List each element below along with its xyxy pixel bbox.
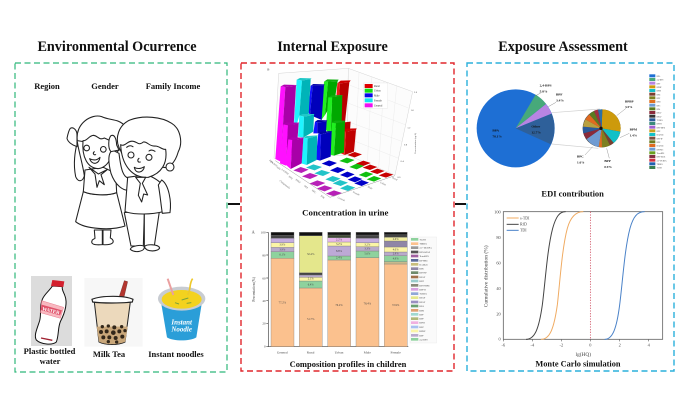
axis ticks: [502, 342, 651, 347]
axis ticks: 4: [648, 342, 651, 347]
connector: left to middle: [228, 203, 240, 205]
legend: General: [374, 104, 383, 107]
bar value labels: 3.9%: [279, 243, 286, 247]
axis titles: lg(HQ): [576, 351, 591, 358]
compound labels: Compounds: [279, 180, 291, 190]
food labels: Plastic bottled: [24, 346, 76, 356]
axis tick labels: 0.0: [397, 176, 401, 179]
chart: stacked bar composition: 60: [262, 276, 266, 280]
pie legend: BPTMC: [657, 149, 664, 151]
chart: stacked bar composition: 20: [262, 322, 266, 326]
main pie labels: 3.4%: [556, 98, 564, 102]
connector: middle to right: [455, 203, 466, 205]
legend: BPC: [419, 326, 424, 329]
food labels: Instant noodles: [148, 349, 204, 359]
chart: stacked bar composition: Percentation (%): [252, 276, 256, 302]
pie legend: TGSH: [657, 168, 662, 170]
secondary pie labels: 0.9%: [604, 165, 612, 169]
axis tick labels: 0.8: [404, 143, 408, 146]
bar: Male: [356, 232, 379, 347]
secondary pie labels: 1.6%: [577, 160, 585, 164]
pie legend: BPP: [657, 98, 661, 100]
compound labels: BPE: [320, 195, 326, 200]
axis ticks: -4: [531, 342, 535, 347]
bar value labels: 51.7%: [307, 317, 315, 321]
legend: [507, 215, 530, 233]
bar value labels: 76.2%: [335, 303, 343, 307]
chart: 3D bar concentration in urine: [267, 68, 418, 217]
bar value labels: 78.4%: [364, 302, 372, 306]
category labels: Rural: [307, 350, 315, 354]
compound labels: BPA: [268, 159, 274, 165]
row labels: Urban: [380, 181, 387, 187]
axis ticks: -2: [560, 342, 563, 347]
bar value labels: 3.3%: [364, 247, 371, 251]
pie legend: BPZ: [657, 131, 661, 133]
main pie labels: 12.7%: [531, 130, 541, 134]
bar value labels: 3.9%: [279, 247, 286, 251]
pie legend: TetraBPS: [657, 153, 664, 155]
chart: stacked bar composition: A: [252, 229, 256, 234]
panel: exposure assessment frame: [467, 63, 674, 371]
pie legend: BPC: [657, 105, 661, 107]
cyan row: [293, 78, 355, 191]
pie legend: BPZ: [657, 94, 661, 96]
compound labels: BPP: [303, 185, 309, 190]
factor labels: Family Income: [146, 81, 200, 91]
compound labels: BPC: [311, 189, 317, 195]
pie legend: BPS-MPE: [657, 127, 666, 129]
secondary pie labels: BPM: [630, 128, 638, 132]
legend: BPP: [419, 318, 424, 321]
row labels: Male: [367, 186, 374, 191]
main pie labels: [492, 84, 564, 138]
legend: BPTMC: [419, 259, 428, 262]
factor labels: Gender: [91, 81, 119, 91]
bar value labels: 2.2%: [336, 237, 343, 241]
chart: 3D bar concentration in urine: B: [267, 68, 269, 72]
axis ticks: 2: [619, 342, 621, 347]
pie legend: BPS-IP: [657, 138, 664, 140]
secondary pie labels: 1.4%: [630, 134, 638, 138]
pie legend: BPB: [657, 102, 661, 104]
legend: BPM: [419, 322, 425, 325]
panel: environmental occurrence frame: [15, 63, 227, 372]
pie legend: 2,4-BPS: [657, 80, 663, 82]
pie legend: BPS-MAE: [657, 156, 666, 159]
row labels: General: [337, 196, 346, 202]
legend: s-TDI: [520, 215, 530, 220]
caption: Monte Carlo simulation: Monte Carlo simulation: [535, 360, 621, 369]
pie legend: BPBP: [657, 87, 662, 89]
legend: BPS-MAE: [419, 251, 431, 254]
bars: [268, 78, 398, 202]
compound labels: BPAF: [295, 178, 302, 185]
chart: Monte Carlo cumulative curves: Cumulative distribution (%): [483, 245, 490, 307]
chart: Monte Carlo cumulative curves: 0: [498, 337, 501, 342]
axis tick labels: [397, 91, 418, 179]
main pie labels: BPA: [492, 128, 500, 132]
icon: plastic bottled water: [31, 276, 72, 346]
bar value labels: [279, 237, 400, 321]
legend: BP4: [419, 305, 424, 308]
panel: internal exposure frame: [241, 63, 454, 371]
chart: stacked bar composition: 0: [264, 345, 266, 349]
chart: Monte Carlo cumulative curves: 80: [496, 235, 501, 240]
chart: Monte Carlo cumulative curves: [483, 210, 663, 369]
pie legend: TBBPA: [657, 163, 663, 166]
illustration: two children: [67, 116, 181, 252]
legend: TCBPA: [419, 293, 427, 296]
caption: EDI contribution: EDI contribution: [541, 188, 604, 198]
legend: BPPH: [419, 288, 426, 291]
caption: composition profiles: Composition profiles in children: [290, 359, 407, 369]
axis tick labels: 1.6: [411, 109, 415, 112]
legend: [364, 83, 388, 108]
legend: Urban: [374, 90, 381, 93]
axis tick labels: Concentration (ng/L): [414, 133, 417, 154]
connector lines: [552, 109, 600, 148]
factor labels: [34, 81, 200, 91]
category labels: Male: [364, 350, 371, 354]
bar value labels: 2.6%: [393, 237, 399, 241]
legend: BPAF: [419, 301, 426, 304]
pie legend: BPM: [657, 91, 661, 93]
main pie: [477, 89, 555, 167]
legend: BPE: [419, 268, 424, 271]
bar value labels: 4.9%: [393, 257, 399, 261]
bar: Rural: [299, 232, 322, 347]
factor labels: Region: [34, 81, 60, 91]
legend: TDI: [520, 228, 527, 233]
bar: Female: [384, 232, 407, 347]
magenta row: [275, 85, 342, 196]
main pie labels: 78.1%: [492, 134, 502, 138]
row labels: [337, 177, 398, 202]
legend: TGSH: [419, 238, 426, 241]
chart: Monte Carlo cumulative curves: 40: [496, 286, 501, 291]
category labels: General: [277, 350, 288, 354]
legend: BPF: [419, 313, 424, 316]
legend: Female: [374, 99, 383, 102]
bar: General: [271, 232, 294, 347]
compound labels: 2,4-BPA: [281, 168, 289, 176]
secondary pie labels: [577, 99, 638, 169]
legend: BADGE: [419, 263, 428, 266]
chart: Monte Carlo cumulative curves: 100: [494, 210, 501, 215]
legend: BPS-IP: [419, 272, 427, 275]
secondary pie labels: 3.5%: [625, 105, 633, 109]
icon: milk tea: [84, 278, 143, 347]
legend: BPAF: [419, 276, 426, 279]
pie legend: [649, 74, 667, 170]
bar value labels: 2.1%: [308, 277, 314, 281]
pie legend: BPAF: [657, 112, 662, 115]
axis ticks: -6: [502, 342, 506, 347]
bar value labels: 5.6%: [364, 252, 371, 256]
icon: instant noodles: [158, 279, 205, 340]
axis tick labels: 0.4: [401, 160, 405, 163]
bar value labels: 8.8%: [336, 249, 343, 253]
pie legend: BPE: [657, 142, 661, 144]
category labels: Urban: [335, 350, 344, 354]
pie legend: TCBPA: [657, 119, 663, 122]
main pie labels: 2,4-BPS: [540, 84, 552, 88]
pie legend: BPPH: [657, 124, 662, 126]
pie legend: BPA: [657, 75, 661, 78]
secondary pie labels: BPP: [604, 159, 611, 163]
pie legend: BPAP: [657, 115, 662, 118]
walls: [274, 68, 413, 175]
legend: [410, 237, 437, 343]
bar value labels: 3.2%: [336, 242, 343, 246]
legend: BPS-MPE: [419, 284, 430, 287]
pie legend: BADGE: [657, 134, 664, 137]
pie legend: BADGE: [657, 145, 664, 148]
secondary pie labels: BPC: [577, 154, 584, 158]
chart: Monte Carlo cumulative curves: 60: [496, 260, 501, 265]
bar value labels: 32.4%: [307, 252, 315, 256]
secondary pie labels: BPBP: [625, 99, 634, 103]
legend: TBBPA: [419, 243, 427, 246]
main pie labels: BPF: [556, 93, 563, 97]
axis tick labels: 1.2: [407, 126, 411, 129]
category labels: [277, 350, 401, 354]
compound labels: 2,4-BPS: [269, 160, 278, 168]
title: Exposure Assessment: Exposure Assessment: [498, 39, 628, 55]
legend: Male: [374, 94, 380, 97]
chart: stacked bar composition: 80: [262, 253, 266, 257]
compound labels: BPF: [276, 166, 282, 171]
legend: BPB: [419, 309, 424, 312]
axis tick labels: 2.0: [414, 91, 418, 94]
title: Environmental Ocurrence: Environmental Ocurrence: [37, 39, 197, 55]
pie legend: BPF: [657, 83, 661, 85]
icon: plastic bottled water: WATER: [41, 307, 60, 316]
chart: Monte Carlo cumulative curves: 20: [496, 311, 501, 316]
main pie labels: 5.8%: [540, 89, 548, 93]
legend: BPZ: [419, 280, 424, 283]
bar value labels: 2.4%: [336, 256, 343, 260]
chart: stacked bar composition: 100: [261, 231, 266, 235]
compound labels: BPZ: [288, 175, 294, 181]
icons: foods: [31, 276, 205, 347]
icon: instant noodles: Noodle: [170, 326, 192, 334]
bar: Urban: [328, 232, 351, 347]
pie legend: 2,2'-DCBPA: [657, 159, 667, 162]
legend: BPAP: [419, 297, 426, 300]
bar value labels: 6.4%: [308, 282, 314, 286]
food labels: Milk Tea: [93, 349, 126, 359]
bar value labels: 2.9%: [393, 252, 399, 256]
caption: concentration in urine: Concentration in urine: [302, 207, 389, 217]
blue row: [308, 84, 369, 186]
row labels: Female: [352, 191, 361, 197]
legend: 2,2'-DCBPA: [419, 247, 432, 250]
girl: [67, 116, 130, 245]
main pie labels: Other: [531, 124, 541, 128]
legend: Rural: [374, 85, 380, 88]
chart: stacked bar composition: 40: [262, 299, 266, 303]
red row: [335, 80, 393, 178]
legend: TetraBPS: [419, 255, 429, 258]
category labels: Female: [391, 350, 401, 354]
floor edges: [275, 161, 395, 197]
legend: BPF: [419, 334, 424, 337]
title: Internal Exposure: Internal Exposure: [277, 39, 388, 55]
pie legend: BP4: [657, 109, 660, 111]
food labels: water: [40, 356, 61, 366]
bar value labels: 72.9%: [392, 303, 400, 307]
boy: [109, 117, 181, 252]
legend: BPBP: [419, 330, 426, 333]
secondary pie: [583, 109, 621, 147]
legend: RfD: [520, 222, 527, 227]
bar value labels: 4.0%: [393, 247, 399, 251]
green row: [321, 79, 381, 182]
row labels: Rural: [392, 177, 398, 182]
food labels: [24, 346, 204, 366]
legend: 2,4-BPS: [419, 338, 428, 341]
chart: stacked bar composition: [252, 229, 437, 369]
axis ticks: 0: [589, 342, 591, 347]
chart: EDI pie: [477, 74, 667, 198]
bar value labels: 3.2%: [364, 243, 371, 247]
bar value labels: 6.1%: [279, 253, 286, 257]
compound labels: [268, 159, 326, 200]
bar value labels: 77.2%: [279, 300, 287, 304]
icon: instant noodles: Instant: [170, 319, 193, 327]
